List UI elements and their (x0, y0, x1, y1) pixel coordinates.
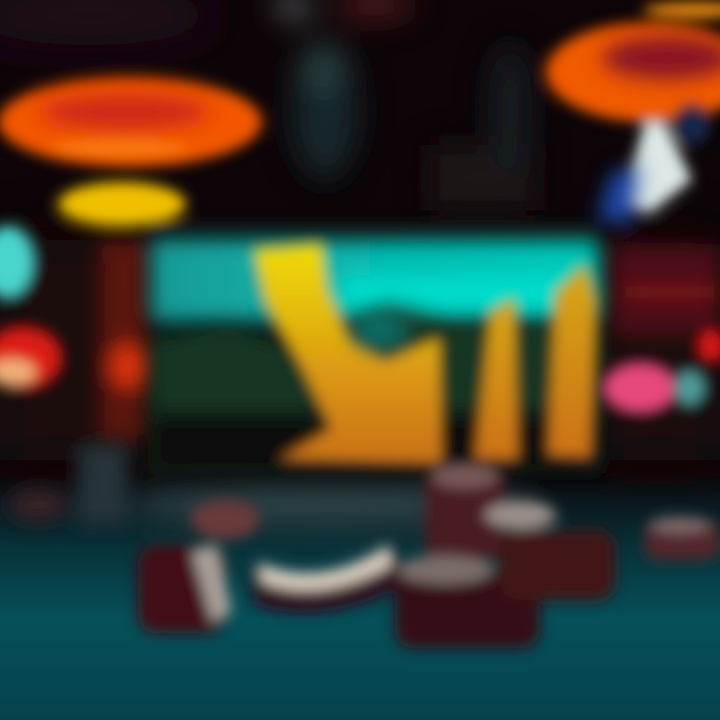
chart: middle bar (474, 297, 519, 460)
left sign: pole (100, 240, 146, 440)
right panel: pink block (604, 364, 676, 412)
background: dark silhouettes (278, 0, 535, 210)
screen: dark green hills (150, 305, 600, 470)
chips: centre white chip (250, 545, 405, 613)
screen: sky top shadow (150, 222, 600, 282)
screen: dark base (150, 228, 600, 473)
floor: grey haze behind chips (125, 485, 535, 525)
screen: teal sky (152, 238, 598, 320)
screen: bright sky band (340, 275, 590, 311)
left edge: cyan light (0, 226, 34, 298)
background: upper left wall (0, 0, 220, 45)
screen: dark lower band (150, 415, 600, 473)
chart: teal notch (352, 310, 408, 350)
background: side walls (0, 240, 720, 460)
chips: right stack (484, 501, 720, 600)
floor base (0, 470, 720, 720)
chart: large yellow curve (254, 244, 443, 464)
left floor: grey object (8, 445, 128, 525)
left edge: red and cream light (0, 328, 60, 388)
chips: central tall stack (395, 464, 540, 648)
right panel: dark red signage (612, 245, 720, 335)
screen panel (150, 222, 600, 473)
right sign: orange ring (546, 2, 720, 122)
right panel: red dot (698, 330, 720, 362)
chart: right bar (547, 264, 596, 458)
left sign: red glow on pole (108, 342, 148, 390)
chips: left stack (138, 500, 259, 633)
right panel: teal block (674, 370, 706, 406)
left sign: orange disc (0, 77, 262, 167)
poker chips (138, 464, 720, 648)
left sign: yellow lamp (58, 182, 186, 226)
right sign: white and blue lamp (598, 105, 710, 225)
